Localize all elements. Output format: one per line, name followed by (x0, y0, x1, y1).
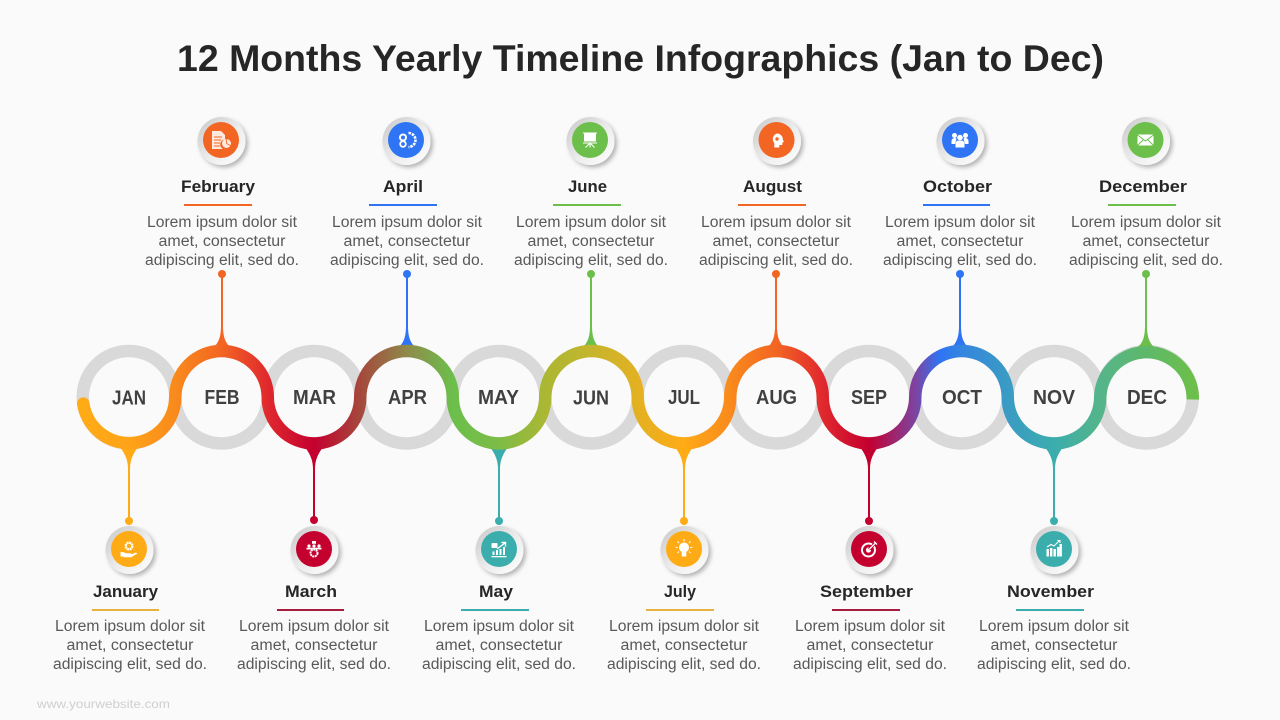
icon: head with idea (753, 117, 801, 165)
body text: amet, consectetur (250, 637, 378, 654)
panel: December (1069, 117, 1223, 269)
body text: Lorem ipsum dolor sit (424, 618, 575, 635)
connector pins above (214, 270, 1154, 347)
month labels: AUG (756, 387, 797, 409)
body text (883, 214, 1037, 269)
panel: September (793, 526, 947, 673)
heading: April (383, 177, 423, 196)
title: 12 Months Yearly Timeline Infographics (Jan to Dec) (177, 38, 1104, 79)
panel: October (883, 117, 1037, 269)
month labels: SEP (851, 387, 887, 409)
coloured gradient ribbon (77, 351, 1193, 443)
body text: amet, consectetur (436, 637, 562, 654)
body text: adipiscing elit, sed do. (699, 252, 853, 269)
heading: July (664, 582, 696, 601)
heading: December (1099, 177, 1187, 196)
body text: Lorem ipsum dolor sit (516, 214, 667, 231)
month labels: JUN (573, 388, 609, 410)
heading: November (1007, 582, 1094, 601)
heading: March (285, 582, 337, 601)
body text: amet, consectetur (620, 637, 748, 654)
heading: June (568, 177, 607, 196)
panel: January (53, 526, 207, 673)
body text (237, 618, 391, 673)
month labels: APR (388, 387, 428, 409)
body text: adipiscing elit, sed do. (145, 252, 299, 269)
month labels (112, 387, 1167, 410)
month labels: MAY (478, 387, 520, 409)
heading: February (181, 177, 256, 196)
icon: light bulb (660, 526, 708, 574)
body text (422, 618, 576, 673)
body text: amet, consectetur (1082, 233, 1210, 250)
timeline chart (77, 270, 1193, 525)
body text: amet, consectetur (528, 233, 654, 250)
body text: amet, consectetur (66, 637, 194, 654)
panel: March (237, 526, 391, 673)
heading: May (479, 582, 514, 601)
month labels: JAN (112, 388, 146, 410)
heading: January (93, 582, 159, 601)
heading: October (923, 177, 992, 196)
body text: amet, consectetur (896, 233, 1024, 250)
grey rings (83, 351, 1193, 443)
heading: September (820, 582, 913, 601)
panel: November (977, 526, 1131, 673)
body text (53, 618, 207, 673)
icon: envelope (1122, 117, 1170, 165)
body text: Lorem ipsum dolor sit (795, 618, 946, 635)
body text: adipiscing elit, sed do. (793, 656, 947, 673)
month labels: FEB (204, 387, 240, 409)
body text: adipiscing elit, sed do. (422, 656, 576, 673)
body text (1069, 214, 1223, 269)
body text: adipiscing elit, sed do. (883, 252, 1037, 269)
body text: Lorem ipsum dolor sit (609, 618, 760, 635)
body text (977, 618, 1131, 673)
body text: Lorem ipsum dolor sit (1071, 214, 1222, 231)
heading: August (743, 177, 802, 196)
body text: adipiscing elit, sed do. (1069, 252, 1223, 269)
icon: growth chart with briefcase (476, 526, 524, 574)
panel: May (422, 526, 576, 673)
month labels: JUL (668, 387, 700, 409)
icon: team of people (936, 117, 984, 165)
body text: Lorem ipsum dolor sit (701, 214, 852, 231)
body text: adipiscing elit, sed do. (514, 252, 668, 269)
body text: amet, consectetur (158, 233, 286, 250)
body text: amet, consectetur (344, 233, 470, 250)
icon: gears (382, 117, 430, 165)
body text: amet, consectetur (990, 637, 1118, 654)
body text (793, 618, 947, 673)
connector pins below (120, 447, 1063, 525)
body text: amet, consectetur (712, 233, 840, 250)
footer website: www.yourwebsite.com (36, 697, 170, 711)
month labels: OCT (942, 387, 982, 409)
body text: adipiscing elit, sed do. (53, 656, 207, 673)
month labels: MAR (293, 387, 337, 409)
icon: target with arrow (846, 526, 894, 574)
body text (330, 214, 484, 269)
body text: adipiscing elit, sed do. (607, 656, 761, 673)
icon: team with gear (290, 526, 338, 574)
body text (607, 618, 761, 673)
icon: hand holding gear (106, 526, 154, 574)
body text: Lorem ipsum dolor sit (332, 214, 483, 231)
month labels: NOV (1033, 387, 1076, 409)
body text: adipiscing elit, sed do. (977, 656, 1131, 673)
panel: February (145, 117, 299, 269)
icon: presentation board (566, 117, 614, 165)
body text (699, 214, 853, 269)
body text (145, 214, 299, 269)
icon: bar chart with arrow (1030, 526, 1078, 574)
body text: amet, consectetur (806, 637, 934, 654)
panel: April (330, 117, 484, 269)
body text: adipiscing elit, sed do. (237, 656, 391, 673)
body text (514, 214, 668, 269)
month labels: DEC (1127, 387, 1167, 409)
body text: Lorem ipsum dolor sit (239, 618, 390, 635)
panel: June (514, 117, 668, 269)
body text: Lorem ipsum dolor sit (147, 214, 298, 231)
body text: adipiscing elit, sed do. (330, 252, 484, 269)
body text: Lorem ipsum dolor sit (55, 618, 206, 635)
body text: Lorem ipsum dolor sit (885, 214, 1036, 231)
panel: July (607, 526, 761, 673)
body text: Lorem ipsum dolor sit (979, 618, 1130, 635)
icon: report document (198, 117, 246, 165)
panel: August (699, 117, 853, 269)
